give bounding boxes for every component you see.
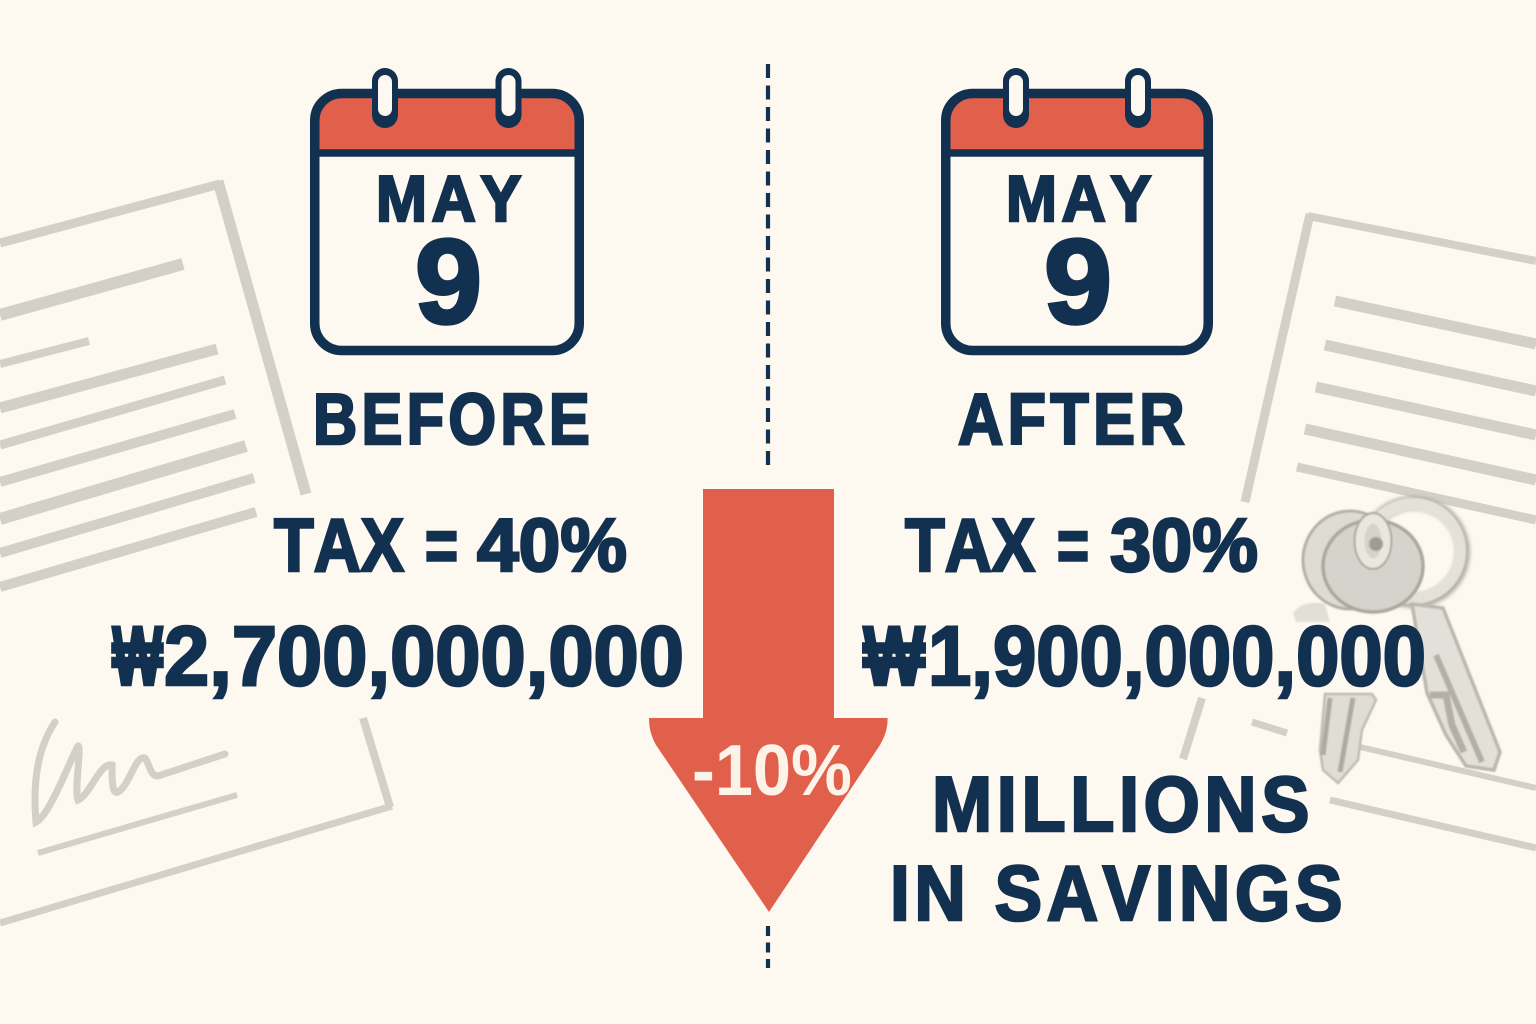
tax rate after: 30%: [1110, 503, 1258, 587]
tax amount before: ₩: [112, 609, 163, 703]
heading: before: BEFORE: [313, 380, 594, 460]
panel: after: [863, 68, 1426, 937]
calendar day: 9: [1044, 215, 1112, 349]
arrow label: -10%: [692, 731, 852, 811]
background illustration: property document right: [1183, 214, 1536, 848]
front key head: [1323, 520, 1423, 612]
tax amount after: 1,900,000,000: [928, 609, 1426, 703]
calendar day: 9: [415, 215, 482, 349]
tax rate after: =: [1057, 503, 1089, 587]
tax amount after: ₩: [863, 609, 926, 703]
back key head: [1303, 511, 1397, 609]
tax rate after: TAX: [905, 503, 1035, 587]
icon: keys: [1293, 503, 1500, 783]
callout: millions in savings: IN SAVINGS: [890, 849, 1347, 937]
callout: millions in savings: [890, 760, 1347, 937]
small ring: [1360, 519, 1386, 563]
tax rate before: 40%: [477, 503, 627, 587]
tax amount before: 2,700,000,000: [164, 609, 684, 703]
icon: calendar before: [314, 68, 580, 350]
tax rate before: TAX: [274, 503, 404, 587]
callout: millions in savings: MILLIONS: [932, 760, 1314, 848]
centre dashed divider: [766, 64, 770, 968]
right key blade: [1412, 604, 1500, 770]
calendar month: MAY: [376, 162, 526, 235]
heading: after: AFTER: [958, 380, 1189, 460]
calendar month: MAY: [1006, 162, 1156, 235]
arrow: ten percent decrease: [649, 489, 888, 912]
left key blade: [1320, 694, 1376, 783]
hidden key stub: [1293, 603, 1330, 622]
panel: before: [112, 68, 684, 703]
background illustration: tax document left: [0, 181, 392, 923]
tax rate before: =: [425, 503, 458, 587]
signature: [35, 722, 225, 822]
icon: calendar after: [945, 68, 1209, 350]
key ring: [1365, 503, 1463, 601]
